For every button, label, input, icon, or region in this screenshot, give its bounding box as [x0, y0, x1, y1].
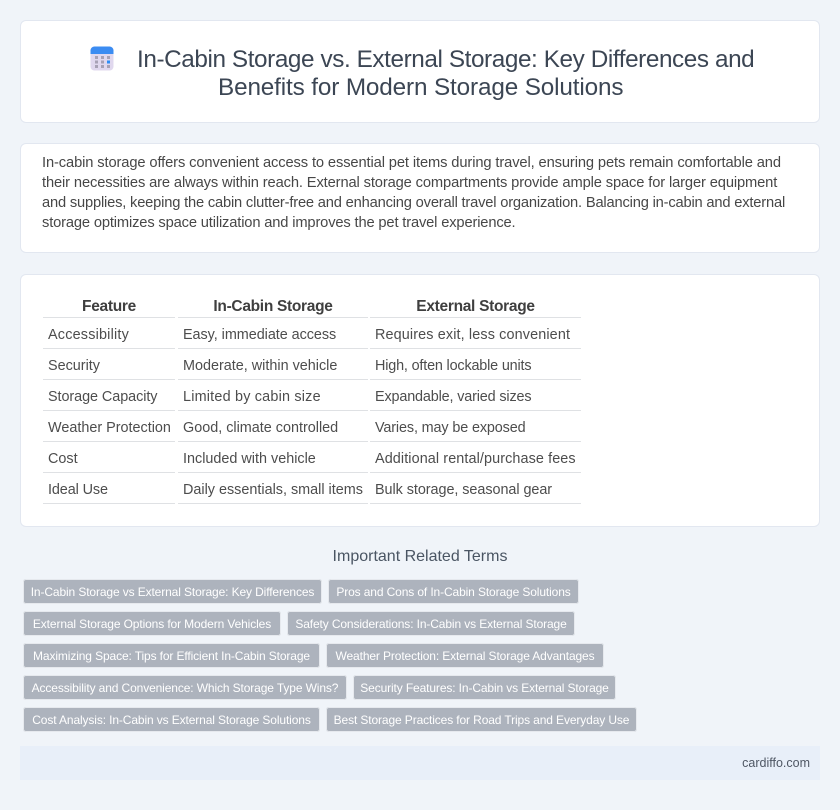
related terms heading: Important Related Terms [333, 548, 507, 565]
title: Benefits for Modern Storage Solutions [218, 74, 623, 101]
tag: Weather Protection: External Storage Advantages [336, 649, 594, 663]
text: Bulk storage, seasonal gear [375, 482, 552, 498]
text: Moderate, within vehicle [183, 358, 337, 374]
row: ideal use: Ideal Use [48, 482, 108, 498]
text: High, often lockable units [375, 358, 531, 374]
panel: introduction [20, 143, 820, 253]
tag: In-Cabin Storage vs External Storage: Key Differences [31, 585, 314, 599]
tag list [23, 579, 637, 732]
panel: comparison table [20, 274, 820, 527]
intro text: storage optimizes space utilization and improves the pet travel experience. [42, 215, 515, 231]
tag [23, 707, 320, 732]
intro text: and supplies, keeping the cabin clutter-free and enhancing overall travel organization. Balancing in-cabin and external [42, 195, 785, 211]
tag [23, 675, 347, 700]
tag: Security Features: In-Cabin vs External Storage [360, 681, 609, 695]
row: security: Security [48, 358, 100, 374]
tag [353, 675, 616, 700]
text: Limited by cabin size [183, 389, 321, 405]
text: Requires exit, less convenient [375, 327, 570, 343]
footer text: cardiffo.com [742, 756, 810, 770]
text: Daily essentials, small items [183, 482, 363, 498]
tag [328, 579, 579, 604]
header panel [20, 20, 820, 123]
tag [23, 579, 322, 604]
tag [287, 611, 575, 636]
footer bar [20, 746, 820, 780]
tag: Best Storage Practices for Road Trips and Everyday Use [334, 713, 629, 727]
table header: feature: Feature [82, 298, 136, 315]
text: Additional rental/purchase fees [375, 451, 576, 467]
tag: Safety Considerations: In-Cabin vs External Storage [295, 617, 567, 631]
text: Easy, immediate access [183, 327, 336, 343]
row: accessibility: Accessibility [48, 327, 129, 343]
row: storage capacity: Storage Capacity [48, 389, 157, 405]
tag [326, 707, 637, 732]
intro text [42, 155, 785, 231]
table header: external storage: External Storage [416, 298, 535, 315]
tag: Maximizing Space: Tips for Efficient In-Cabin Storage [33, 649, 310, 663]
tag: Accessibility and Convenience: Which Storage Type Wins? [32, 681, 338, 695]
title [137, 46, 754, 101]
tag: External Storage Options for Modern Vehicles [33, 617, 271, 631]
tag [23, 643, 320, 668]
row: weather protection: Weather Protection [48, 420, 171, 436]
tag [326, 643, 604, 668]
intro text: In-cabin storage offers convenient access to essential pet items during travel, ensuring pets remain comfortable and [42, 155, 781, 171]
tag [23, 611, 281, 636]
intro text: their necessities are always within reach. External storage compartments provide ample space for larger equipment [42, 175, 777, 191]
icon: calendar [90, 46, 114, 70]
text: Varies, may be exposed [375, 420, 525, 436]
table header: in-cabin storage: In-Cabin Storage [213, 298, 333, 315]
tag: Pros and Cons of In-Cabin Storage Solutions [336, 585, 571, 599]
title: In-Cabin Storage vs. External Storage: Key Differences and [137, 46, 754, 73]
text: Good, climate controlled [183, 420, 338, 436]
row: cost: Cost [48, 451, 78, 467]
text: Included with vehicle [183, 451, 316, 467]
tag: Cost Analysis: In-Cabin vs External Storage Solutions [32, 713, 311, 727]
text: Expandable, varied sizes [375, 389, 531, 405]
